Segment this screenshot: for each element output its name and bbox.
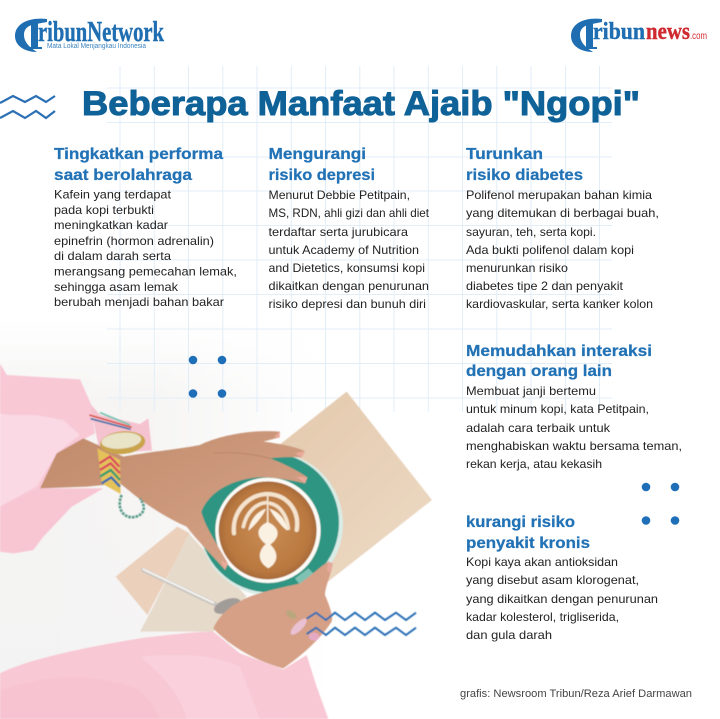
credit: grafis: Newsroom Tribun/Reza Arief Darmawan: [460, 688, 692, 700]
body text: [54, 188, 237, 309]
body text: dan gula darah: [466, 628, 552, 642]
body text: Ada bukti polifenol dalam kopi: [466, 243, 634, 257]
body text: Kafein yang terdapat: [54, 188, 172, 202]
woven bracelet: [97, 448, 144, 517]
dots decoration right: [642, 483, 679, 525]
body text: [466, 188, 659, 311]
emblem: [571, 19, 602, 52]
body text: rekan kerja, atau kekasih: [466, 457, 602, 471]
heading: [466, 146, 583, 184]
cup with latte art: [215, 478, 321, 583]
body text: sayuran, teh, serta kopi.: [466, 225, 596, 239]
body text: [466, 555, 658, 642]
sleeve upper left: [0, 363, 152, 553]
body text: kardiovaskular, serta kanker kolon: [466, 297, 653, 311]
heading: risiko depresi: [268, 167, 375, 184]
body text: MS, RDN, ahli gizi dan ahli diet: [268, 206, 430, 220]
heading: risiko diabetes: [466, 167, 583, 184]
rings: [285, 608, 319, 641]
upper hand: [40, 431, 307, 570]
body text: merangsang pemecahan lemak,: [54, 264, 237, 278]
zigzag lower: [307, 613, 416, 635]
body text: dikaitkan dengan penurunan: [268, 279, 429, 293]
panel: penyakit kronis: [466, 514, 658, 642]
body text: yang ditemukan di berbagai buah,: [466, 206, 659, 220]
body text: Polifenol merupakan bahan kimia: [466, 188, 652, 202]
tagline: Mata Lokal Menjangkau Indonesia: [47, 43, 146, 50]
body text: sehingga asam lemak: [54, 280, 178, 294]
wordmark: ribunNetwork: [38, 16, 165, 48]
panel: risiko depresi: [268, 146, 430, 311]
body text: Kopi kaya akan antioksidan: [466, 555, 618, 569]
watch: [99, 429, 146, 456]
heading: penyakit kronis: [466, 535, 590, 552]
body text: Menurut Debbie Petitpain,: [268, 188, 410, 202]
background photo surface: [0, 320, 330, 719]
heading: kurangi risiko: [466, 514, 575, 531]
heading: Turunkan: [466, 146, 543, 163]
bracelet strings: [89, 413, 132, 429]
lower hand: [213, 562, 333, 668]
body text: kadar kolesterol, trigliserida,: [466, 610, 619, 624]
wooden board large: [235, 392, 432, 587]
body text: and Dietetics, konsumsi kopi: [268, 261, 425, 275]
body text: di dalam darah serta: [54, 249, 171, 263]
panel: interaksi: [466, 343, 682, 471]
dots decoration centre: [189, 356, 226, 398]
panel: performa berolahraga: [54, 146, 237, 309]
panel: risiko diabetes: [466, 146, 659, 311]
body text: yang disebut asam klorogenat,: [466, 573, 639, 587]
cup handle: [295, 568, 315, 588]
heading: [466, 514, 590, 552]
body text: berubah menjadi bahan bakar: [54, 295, 224, 309]
body text: menghabiskan waktu bersama teman,: [466, 439, 682, 453]
body text: risiko depresi dan bunuh diri: [268, 297, 426, 311]
title: Beberapa Manfaat Ajaib "Ngopi": [82, 85, 640, 123]
heading: dengan orang lain: [466, 363, 612, 380]
body text: diabetes tipe 2 dan penyakit: [466, 279, 624, 293]
body text: epinefrin (hormon adrenalin): [54, 234, 214, 248]
saucer: [199, 452, 343, 596]
heading: [54, 146, 223, 184]
sleeve lower: [0, 632, 328, 719]
logo: TribunNetwork: [15, 16, 165, 52]
body text: yang dikaitkan dengan penurunan: [466, 592, 658, 606]
body text: [268, 188, 430, 311]
logo: Tribunnews: [571, 19, 707, 52]
body text: terdaftar serta jurubicara: [268, 225, 408, 239]
spoon: [143, 569, 243, 617]
wooden board small: [116, 527, 247, 632]
heading: saat berolahraga: [54, 167, 192, 184]
body text: untuk minum kopi, kata Petitpain,: [466, 402, 649, 416]
body text: pada kopi terbukti: [54, 203, 154, 217]
heading: Tingkatkan performa: [54, 146, 223, 163]
logo: Tribunnews: .com: [690, 31, 707, 42]
background grid: [107, 66, 612, 412]
body text: untuk Academy of Nutrition: [268, 243, 419, 257]
heading: Memudahkan interaksi: [466, 343, 652, 360]
heading: Mengurangi: [268, 146, 366, 163]
emblem: [15, 19, 47, 52]
zigzag top left: [0, 96, 55, 118]
wordmark: ribun: [593, 19, 645, 45]
body text: Membuat janji bertemu: [466, 384, 596, 398]
body text: menurunkan risiko: [466, 261, 568, 275]
heading: [466, 343, 652, 380]
body text: meningkatkan kadar: [54, 218, 168, 232]
body text: [466, 384, 682, 471]
body text: adalah cara terbaik untuk: [466, 421, 610, 435]
photo: hands holding a coffee cup: [0, 363, 432, 719]
logo: Tribunnews: news: [646, 19, 690, 45]
heading: [268, 146, 375, 184]
